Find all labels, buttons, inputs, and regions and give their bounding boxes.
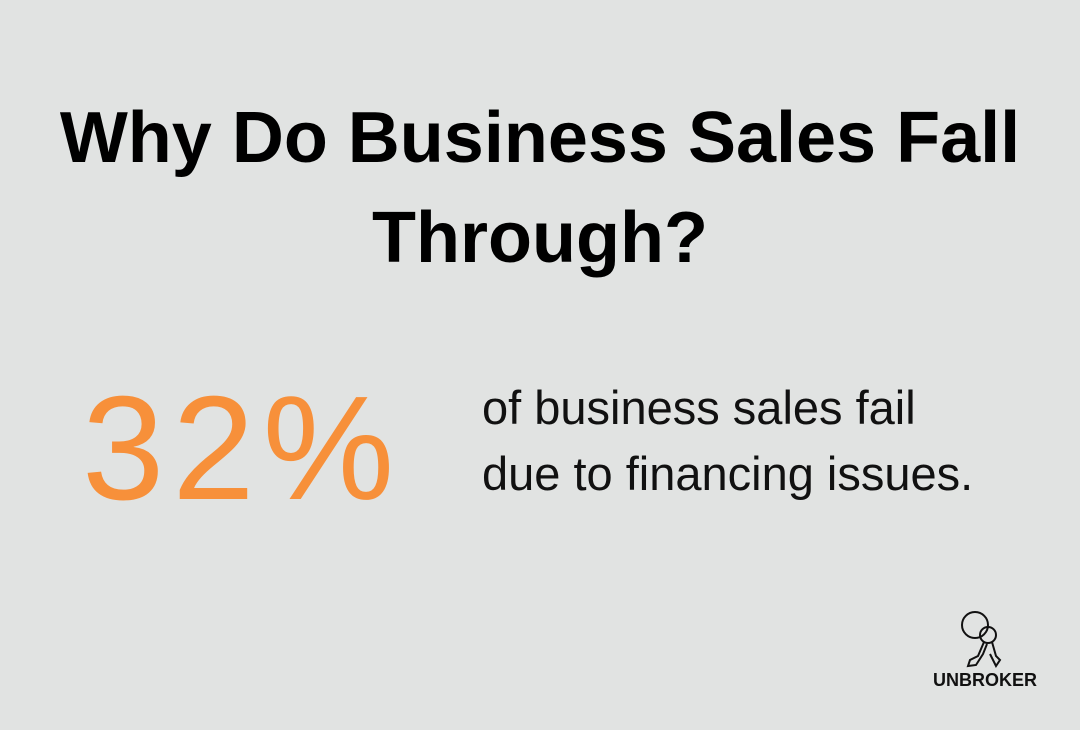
title: Why Do Business Sales Fall — [60, 98, 1020, 178]
logo text: UNBROKER — [933, 670, 1037, 690]
logo: unbroker — [933, 611, 1037, 690]
statistic description: due to financing issues. — [482, 447, 973, 500]
statistic description — [482, 381, 973, 500]
title — [60, 98, 1020, 278]
title: Through? — [372, 198, 708, 278]
statistic number: 32% — [82, 366, 402, 531]
statistic description: of business sales fail — [482, 381, 916, 434]
icon: keys — [961, 611, 1002, 668]
